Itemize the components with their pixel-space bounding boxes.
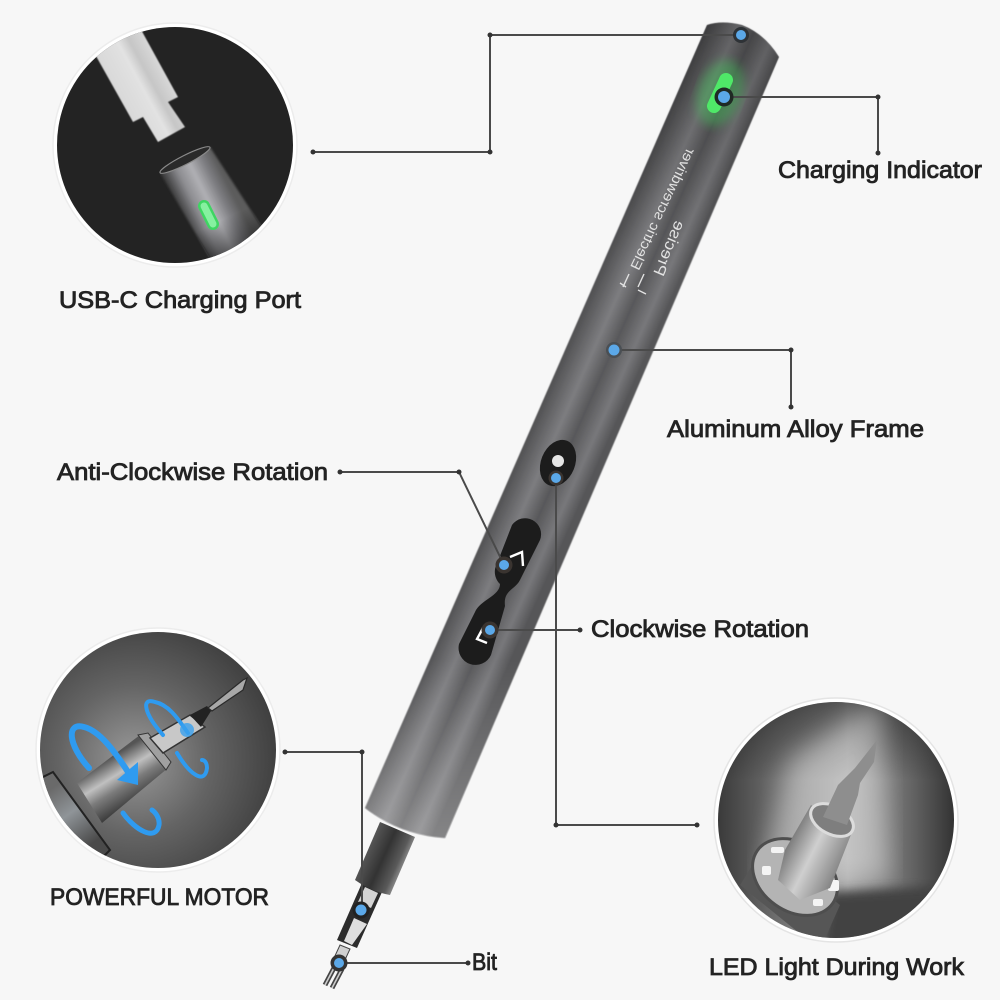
green indicator bbox=[204, 206, 213, 224]
heading: LED Light During Work: LED Light During Work bbox=[709, 954, 965, 981]
LED ring bbox=[751, 837, 839, 916]
pen body bbox=[365, 22, 779, 838]
label: Charging Indicator: Charging Indicator bbox=[778, 157, 982, 184]
panel: powerful motor bbox=[30, 625, 290, 875]
label: Anti-Clockwise Rotation: Anti-Clockwise Rotation bbox=[57, 459, 328, 486]
connector: anti-clockwise bbox=[338, 470, 504, 565]
connector: bit bbox=[339, 960, 470, 966]
driver bit bbox=[150, 678, 247, 753]
motor shaft bbox=[77, 735, 168, 823]
light beam bbox=[760, 700, 890, 880]
connector: aluminum frame bbox=[614, 348, 794, 410]
connector: charging port bbox=[310, 32, 741, 154]
driver bit bbox=[823, 740, 877, 825]
charging light bbox=[714, 80, 726, 106]
USB-C cable bbox=[96, 32, 186, 142]
barrel bbox=[778, 805, 852, 900]
screwdriver pen bbox=[325, 22, 779, 988]
connector: motor bbox=[282, 750, 364, 910]
label: Clockwise Rotation: Clockwise Rotation bbox=[591, 616, 809, 643]
connector: clockwise bbox=[490, 628, 582, 632]
connector: LED bbox=[554, 478, 700, 828]
lower shadow bbox=[821, 882, 936, 938]
panel: USB-C charging port bbox=[50, 15, 300, 275]
printed brand bbox=[620, 145, 699, 294]
heading: POWERFUL MOTOR: POWERFUL MOTOR bbox=[50, 884, 269, 911]
power button bbox=[533, 434, 583, 492]
neck bbox=[355, 822, 415, 895]
label: Aluminum Alloy Frame: Aluminum Alloy Frame bbox=[667, 416, 924, 443]
heading: USB-C Charging Port: USB-C Charging Port bbox=[59, 287, 301, 314]
printed brand: Electric screwdriver bbox=[627, 145, 699, 273]
charging light glow bbox=[688, 54, 752, 132]
bit holder bbox=[337, 883, 382, 948]
pen body in lens bbox=[752, 874, 840, 938]
label: Bit: Bit bbox=[472, 949, 497, 976]
rotation rocker bbox=[459, 518, 541, 665]
LEDs bbox=[762, 847, 839, 906]
panel: LED light during work bbox=[710, 695, 970, 950]
rotation arrows bbox=[72, 701, 207, 833]
printed brand: Precise bbox=[649, 218, 688, 278]
mini pen bbox=[159, 146, 262, 258]
bit collar bbox=[809, 802, 855, 838]
connector: charging indicator bbox=[724, 94, 880, 156]
bit tip bbox=[325, 945, 350, 988]
motor flange bbox=[43, 770, 112, 856]
shaft collar bbox=[138, 733, 171, 770]
blue markers bbox=[330, 27, 749, 972]
